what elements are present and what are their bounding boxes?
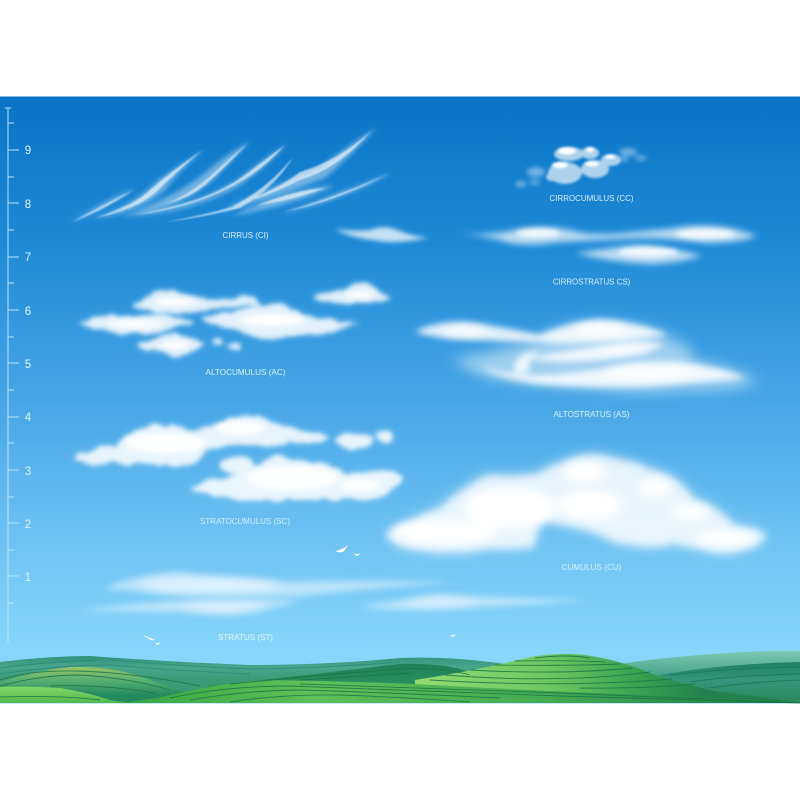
hill: mid centre bbox=[205, 664, 560, 703]
hill: second left bbox=[0, 667, 215, 703]
birds: lower left flock bbox=[143, 635, 160, 645]
hills landscape bbox=[0, 651, 800, 703]
hill: big centre bbox=[415, 654, 800, 703]
altitude numbers: 9 bbox=[25, 145, 31, 157]
label: cirrocumulus: CIRROCUMULUS (CC) bbox=[550, 193, 634, 203]
altitude numbers: 1 bbox=[25, 572, 31, 584]
label: altostratus: ALTOSTRATUS (AS) bbox=[554, 409, 630, 419]
label: cirrus: CIRRUS (CI) bbox=[222, 230, 269, 240]
hill: mid right bbox=[660, 662, 800, 703]
altitude numbers: 6 bbox=[25, 306, 31, 318]
cloud: cirrocumulus bbox=[515, 147, 647, 187]
cloud: stratocumulus bbox=[72, 416, 401, 500]
altitude numbers: 5 bbox=[25, 359, 31, 371]
hill: front band bbox=[120, 680, 800, 703]
bird: distant bbox=[450, 634, 456, 637]
birds: upper flock bbox=[335, 545, 361, 556]
hill: back right bbox=[625, 651, 800, 703]
cloud: small wisp bbox=[335, 227, 428, 242]
altitude numbers: 4 bbox=[25, 412, 32, 424]
label: altocumulus: ALTOCUMULUS (AC) bbox=[206, 367, 286, 377]
cloud: cirrus bbox=[70, 127, 393, 223]
altitude numbers: 7 bbox=[25, 252, 31, 264]
cloud: cirrostratus bbox=[455, 226, 757, 264]
altitude numbers: 2 bbox=[25, 519, 31, 531]
label: stratocumulus: STRATOCUMULUS (SC) bbox=[200, 516, 290, 526]
altitude numbers: 3 bbox=[25, 466, 31, 478]
cloud: cumulus bbox=[385, 455, 765, 553]
label: cumulus: CUMULUS (CU) bbox=[562, 562, 622, 572]
label: cirrostratus: CIRROSTRATUS CS) bbox=[553, 276, 630, 286]
sky background bbox=[0, 96, 800, 704]
altitude numbers bbox=[25, 145, 32, 584]
altitude scale bbox=[5, 108, 19, 643]
cloud: altocumulus bbox=[78, 282, 393, 356]
hill: front left bbox=[0, 687, 130, 703]
contour lines bbox=[0, 656, 800, 703]
hill: back left bbox=[0, 656, 560, 703]
label: stratus: STRATUS (ST) bbox=[218, 632, 273, 642]
cloud: altostratus bbox=[415, 320, 760, 392]
cloud: stratus bbox=[78, 572, 590, 615]
altitude numbers: 8 bbox=[25, 199, 31, 211]
